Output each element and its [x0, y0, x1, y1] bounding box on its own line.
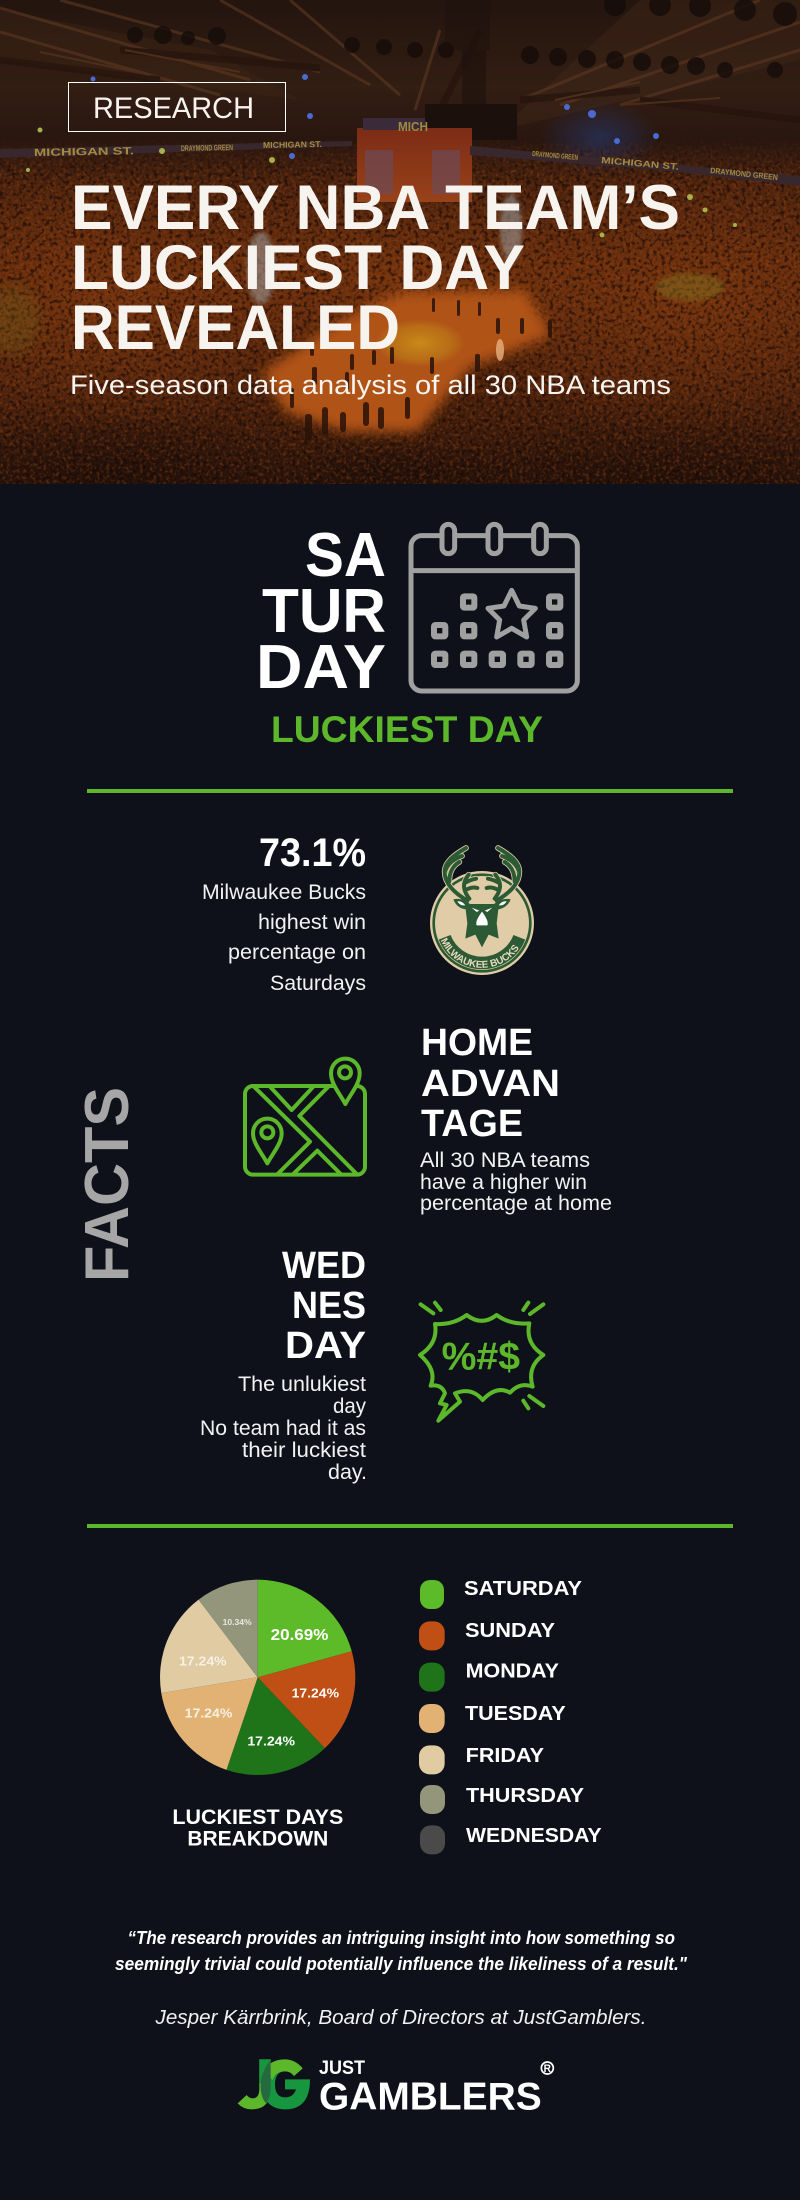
- icon: JG monogram: [238, 2059, 310, 2109]
- quote: “The research provides an intriguing insight into how something so: [128, 1928, 675, 1948]
- legend: FRIDAY: [466, 1744, 544, 1767]
- heading: Saturday: [256, 521, 386, 702]
- heading: Saturday: DAY: [256, 633, 386, 702]
- stat description: [420, 1149, 612, 1215]
- stage lights: [127, 0, 797, 78]
- pie chart: 17.24%: [185, 1705, 232, 1720]
- legend: WEDNESDAY: [466, 1824, 602, 1847]
- stat heading: DAY: [285, 1325, 366, 1367]
- smoke jets: [247, 194, 522, 304]
- stat description: [200, 1373, 367, 1484]
- stat description: day.: [328, 1461, 367, 1484]
- stat description: percentage at home: [420, 1192, 612, 1215]
- icon: swearing speech burst: [420, 1303, 543, 1421]
- jumbotron screen: MICH: [398, 119, 428, 134]
- panel: luckiest days breakdown: [160, 1577, 602, 1854]
- wordmark: JUST: [319, 2058, 365, 2079]
- stat description: No team had it as: [200, 1417, 366, 1440]
- vertical label: facts: FACTS: [73, 1087, 142, 1282]
- title: [75, 184, 678, 349]
- flame jet: [496, 339, 504, 361]
- chart title: LUCKIEST DAYS: [172, 1806, 343, 1829]
- icon: map with pins: [245, 1059, 365, 1175]
- pie chart: 17.24%: [292, 1685, 339, 1700]
- stat description: [202, 881, 366, 995]
- title: LUCKIEST DAY: [71, 233, 525, 303]
- arena ribbon boards: MICHIGAN ST.: [601, 155, 679, 172]
- heading: luckiest day: LUCKIEST DAY: [271, 709, 543, 750]
- pie chart: 17.24%: [179, 1653, 227, 1668]
- crowd texture: [0, 143, 800, 484]
- stat description: highest win: [258, 911, 366, 934]
- stat description: their luckiest: [242, 1439, 366, 1462]
- legend: SUNDAY: [465, 1619, 555, 1642]
- icon: swearing speech burst: %#$: [442, 1335, 520, 1378]
- arena ribbon boards: MICHIGAN ST.: [263, 139, 322, 150]
- arena ribbon boards: MICHIGAN ST.: [34, 145, 134, 159]
- icon: calendar with star: [411, 524, 577, 691]
- arena photo illustration: [0, 0, 800, 484]
- legend: TUESDAY: [465, 1702, 566, 1725]
- logo: JustGamblers: [238, 2058, 553, 2118]
- arena ribbon boards: DRAYMOND GREEN: [532, 149, 578, 162]
- legend: SATURDAY: [464, 1577, 582, 1600]
- arena ribbon boards: DRAYMOND GREEN: [181, 143, 233, 153]
- wordmark: GAMBLERS: [319, 2074, 542, 2118]
- stat heading: [421, 1022, 560, 1145]
- darkening overlay: [0, 0, 800, 484]
- quote attribution: Jesper Kärrbrink, Board of Directors at JustGamblers.: [154, 2007, 647, 2029]
- jumbotron screen: [357, 118, 472, 202]
- icon: Milwaukee Bucks logo: MILWAUKEE BUCKS: [440, 938, 518, 968]
- stat description: percentage on: [228, 941, 366, 964]
- stat heading: HOME: [421, 1022, 533, 1064]
- stat heading: ADVAN: [421, 1063, 560, 1105]
- heading: Saturday: SA: [305, 521, 386, 590]
- pie chart: [160, 1580, 355, 1775]
- divider: [87, 1524, 733, 1528]
- legend: THURSDAY: [466, 1784, 584, 1807]
- crowd lights: [90, 74, 659, 159]
- legend: [419, 1577, 602, 1854]
- title: REVEALED: [71, 293, 400, 363]
- stat: 73.1%: 73.1%: [259, 831, 366, 875]
- fact: Wednesday unluckiest day: [200, 1245, 367, 1484]
- research tag: [68, 82, 286, 132]
- panel: hero arena photo header: [0, 0, 800, 484]
- stat description: Saturdays: [270, 972, 366, 995]
- subtitle: Five-season data analysis of all 30 NBA teams: [70, 370, 671, 400]
- stat heading: WED: [282, 1245, 366, 1287]
- pie chart: 20.69%: [271, 1627, 329, 1644]
- chart title: [172, 1806, 343, 1851]
- roof rafters: [0, 0, 800, 110]
- quote: [115, 1928, 687, 1974]
- quote: seemingly trivial could potentially influence the likeliness of a result.": [115, 1954, 687, 1974]
- stat heading: NES: [292, 1285, 366, 1327]
- arena ribbon boards: [0, 139, 800, 186]
- heading: Saturday: TUR: [262, 577, 386, 646]
- stat description: Milwaukee Bucks: [202, 881, 366, 904]
- wordmark: R: [544, 2063, 551, 2075]
- stat description: The unlukiest: [238, 1373, 366, 1396]
- pie chart: 17.24%: [247, 1733, 295, 1748]
- scoreboard rigging: [425, 50, 517, 140]
- research tag: RESEARCH: [93, 92, 254, 125]
- chart title: BREAKDOWN: [187, 1828, 328, 1851]
- pie chart: 10.34%: [223, 1618, 252, 1627]
- title: EVERY NBA TEAM’S: [71, 173, 680, 243]
- stat heading: [282, 1245, 366, 1367]
- stat description: have a higher win: [420, 1171, 587, 1194]
- fact: home advantage: [420, 1022, 612, 1215]
- stat heading: TAGE: [421, 1103, 523, 1145]
- arena ribbon boards: DRAYMOND GREEN: [710, 166, 779, 182]
- legend: MONDAY: [466, 1660, 559, 1683]
- players on court: [290, 298, 552, 440]
- stat description: day: [333, 1395, 366, 1418]
- fact: Milwaukee Bucks win percentage: [202, 831, 366, 995]
- stat description: All 30 NBA teams: [420, 1149, 590, 1172]
- icon: Milwaukee Bucks logo: [430, 845, 534, 975]
- divider: [87, 789, 733, 793]
- basketball court: [0, 273, 724, 432]
